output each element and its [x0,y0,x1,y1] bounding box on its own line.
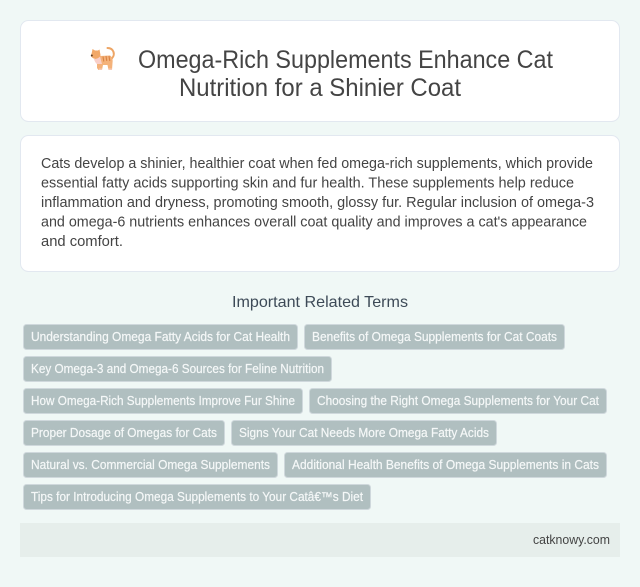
panel: description card [20,136,620,272]
tag [24,484,370,510]
tag: How Omega-Rich Supplements Improve Fur Shine [31,394,295,408]
text block: description [41,155,594,250]
title: Nutrition for a Shinier Coat [179,74,461,102]
panel: related terms tags [24,324,606,510]
icon: cat [91,48,114,70]
tag: Signs Your Cat Needs More Omega Fatty Acids [239,426,489,440]
tag [24,420,224,446]
tag [24,388,302,414]
tag: Natural vs. Commercial Omega Supplements [31,458,270,472]
title [138,46,553,102]
tag [284,452,606,478]
footer: catknowy.com [533,532,610,547]
tag: Additional Health Benefits of Omega Supplements in Cats [292,458,599,472]
text block: description: essential fatty acids supporting skin and fur health. These supplements help reduce [41,174,574,192]
tag: Key Omega-3 and Omega-6 Sources for Feline Nutrition [31,362,324,376]
text block: description: and omega-6 nutrients enhances overall coat quality and improves a cat's appearance [41,214,587,230]
tag [24,324,298,350]
tag [24,452,278,478]
tag: Proper Dosage of Omegas for Cats [31,426,217,440]
tag: Benefits of Omega Supplements for Cat Coats [312,330,557,344]
tag [24,356,332,382]
text block: description: Cats develop a shinier, healthier coat when fed omega-rich supplements, which provide [41,155,593,172]
text block: description: inflammation and dryness, promoting smooth, glossy fur. Regular inclusion of omega-3 [41,194,594,211]
title: Omega-Rich Supplements Enhance Cat [138,46,553,74]
tag: Tips for Introducing Omega Supplements to Your Catâ€™s Diet [31,490,363,504]
footer [20,523,620,557]
heading: related terms: Important Related Terms [232,294,408,311]
tag [304,324,564,350]
tag: Choosing the Right Omega Supplements for Your Cat [317,394,599,408]
panel: title card [20,20,620,122]
tag [310,388,606,414]
tag [232,420,496,446]
text block: description: and comfort. [41,233,123,250]
tag: Understanding Omega Fatty Acids for Cat Health [31,330,290,344]
